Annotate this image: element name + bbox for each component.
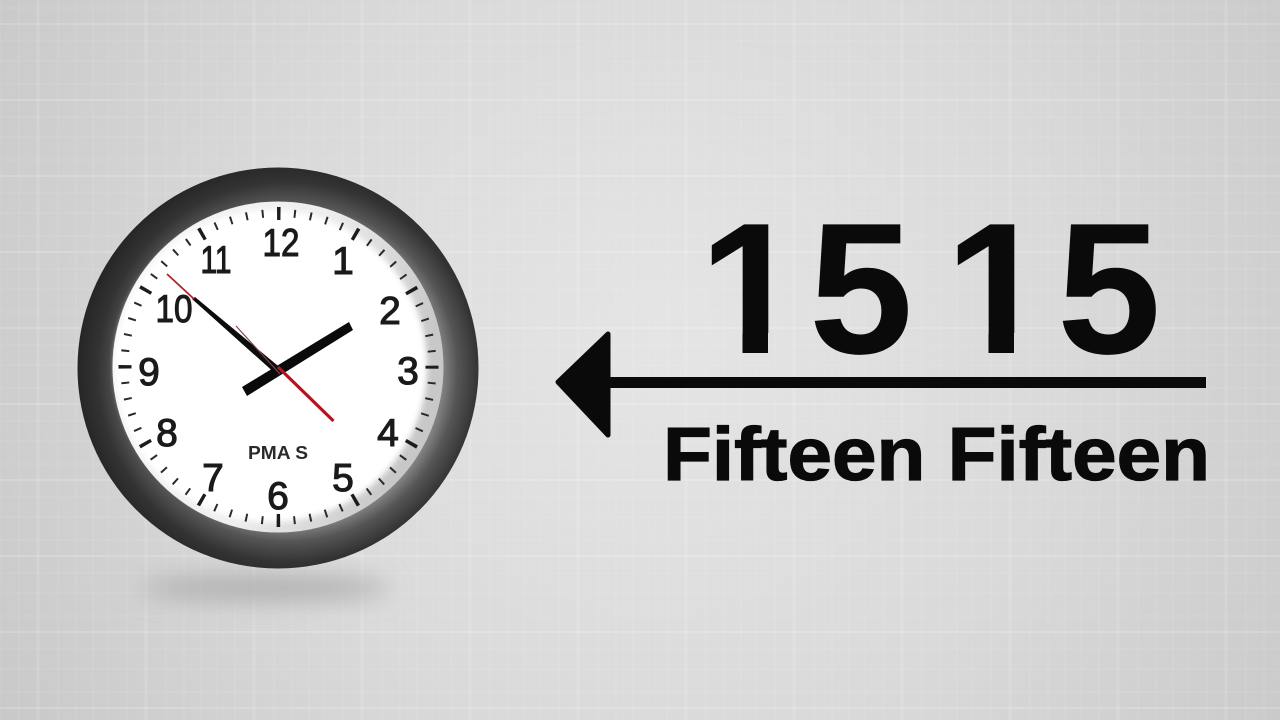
clock numerals: 8 xyxy=(156,412,178,455)
big number: 1515 xyxy=(699,184,1161,393)
clock numerals: 3 xyxy=(397,350,419,393)
clock numerals: 9 xyxy=(138,351,160,394)
icon: wall clock xyxy=(78,168,478,568)
minute hand xyxy=(192,297,283,375)
clock numerals: 4 xyxy=(377,412,399,455)
clock bezel xyxy=(78,168,478,568)
clock numerals: 11 xyxy=(200,239,232,282)
clock drop shadow xyxy=(140,576,390,600)
minute tick marks xyxy=(124,213,432,521)
hour tick marks xyxy=(125,214,432,520)
clock numerals: 1 xyxy=(332,240,354,283)
clock numerals: 10 xyxy=(156,288,192,331)
clock numerals xyxy=(138,222,419,518)
clock numerals: 12 xyxy=(262,222,300,265)
clock face xyxy=(112,202,444,532)
hour hand xyxy=(242,322,353,396)
clock numerals: 7 xyxy=(202,457,224,500)
clock label: PMA S xyxy=(248,443,308,463)
clock numerals: 5 xyxy=(332,457,354,500)
second hand xyxy=(167,274,334,421)
clock numerals: 6 xyxy=(267,475,289,518)
spoken time label: Fifteen Fifteen xyxy=(663,412,1210,496)
clock numerals: 2 xyxy=(379,290,401,333)
arrow pointing left xyxy=(558,334,1206,435)
